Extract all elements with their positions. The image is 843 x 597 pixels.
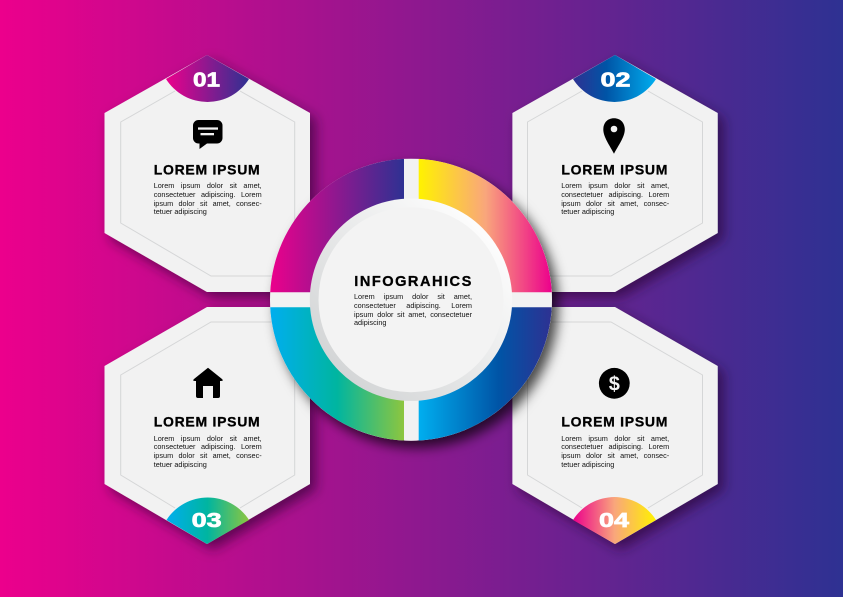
text block 04	[561, 434, 669, 469]
text block 02: consectetuer adipiscing. Lorem	[561, 190, 669, 199]
number cap 02: 02	[600, 70, 630, 92]
ring segment top-left	[270, 159, 404, 292]
number cap 04	[573, 497, 656, 544]
text block 04: consectetuer adipiscing. Lorem	[561, 442, 669, 451]
text block 01: consectetuer adipiscing. Lorem	[154, 190, 262, 199]
icon: map pin	[603, 118, 625, 154]
icon: dollar coin	[599, 368, 630, 399]
text block 04: Lorem ipsum dolor sit amet,	[561, 434, 669, 443]
text block 02	[561, 181, 669, 216]
circle base	[270, 159, 552, 441]
hexagon card 01	[104, 55, 310, 292]
heading 01: LOREM IPSUM	[154, 161, 260, 177]
text block 03: consectetuer adipiscing. Lorem	[154, 442, 262, 451]
text block 03: tetuer adipiscing	[154, 460, 207, 469]
text block 01: ipsum dolor sit amet, consec-	[154, 199, 262, 208]
hexagon card 04	[512, 307, 718, 544]
heading 03: LOREM IPSUM	[154, 414, 260, 430]
text block 01	[154, 181, 262, 216]
panel: central circle	[266, 158, 568, 456]
number cap 02	[573, 55, 656, 102]
text block 03: Lorem ipsum dolor sit amet,	[154, 434, 262, 443]
heading 02: LOREM IPSUM	[561, 161, 667, 177]
hexagon card 03	[104, 307, 310, 544]
center text block	[354, 292, 472, 327]
center text block: Lorem ipsum dolor sit amet,	[354, 292, 472, 301]
number cap 01: 01	[193, 70, 220, 92]
center text block: adipiscing	[354, 318, 386, 327]
text block 01: tetuer adipiscing	[154, 207, 207, 216]
text block 02: ipsum dolor sit amet, consec-	[561, 199, 669, 208]
panel: 03	[102, 305, 324, 556]
center text block: ipsum dolor sit amet, consectetuer	[354, 310, 472, 319]
number cap 01	[166, 55, 249, 102]
panel: 01	[102, 55, 324, 306]
panel: 02	[511, 55, 732, 306]
text block 04: tetuer adipiscing	[561, 460, 614, 469]
inner outline 03	[121, 322, 320, 508]
ring segment top-right	[419, 159, 552, 292]
panel: 04	[511, 306, 732, 556]
icon: house	[193, 368, 223, 398]
center text block: consectetuer adipiscing. Lorem	[354, 301, 472, 310]
inner bevel ring	[310, 199, 512, 401]
inner outline 01	[121, 91, 320, 276]
inner outline 02	[528, 91, 702, 276]
number cap 03	[166, 497, 249, 544]
ring segment bottom-left	[270, 307, 404, 440]
text block 03	[154, 434, 262, 469]
hexagon card 02	[512, 55, 718, 292]
text block 02: tetuer adipiscing	[561, 207, 614, 216]
number cap 04: 04	[599, 510, 630, 532]
text block 04: ipsum dolor sit amet, consec-	[561, 451, 669, 460]
icon: dollar coin: $	[609, 373, 620, 395]
text block 02: Lorem ipsum dolor sit amet,	[561, 181, 669, 190]
center heading: INFOGRAHICS	[354, 274, 472, 290]
number cap 03: 03	[192, 510, 222, 532]
icon: speech bubble	[193, 120, 222, 149]
text block 03: ipsum dolor sit amet, consec-	[154, 451, 262, 460]
inner outline 04	[528, 322, 702, 508]
inner disc	[318, 207, 504, 392]
text block 01: Lorem ipsum dolor sit amet,	[154, 181, 262, 190]
ring segment bottom-right	[419, 307, 552, 440]
heading 04: LOREM IPSUM	[561, 414, 667, 430]
